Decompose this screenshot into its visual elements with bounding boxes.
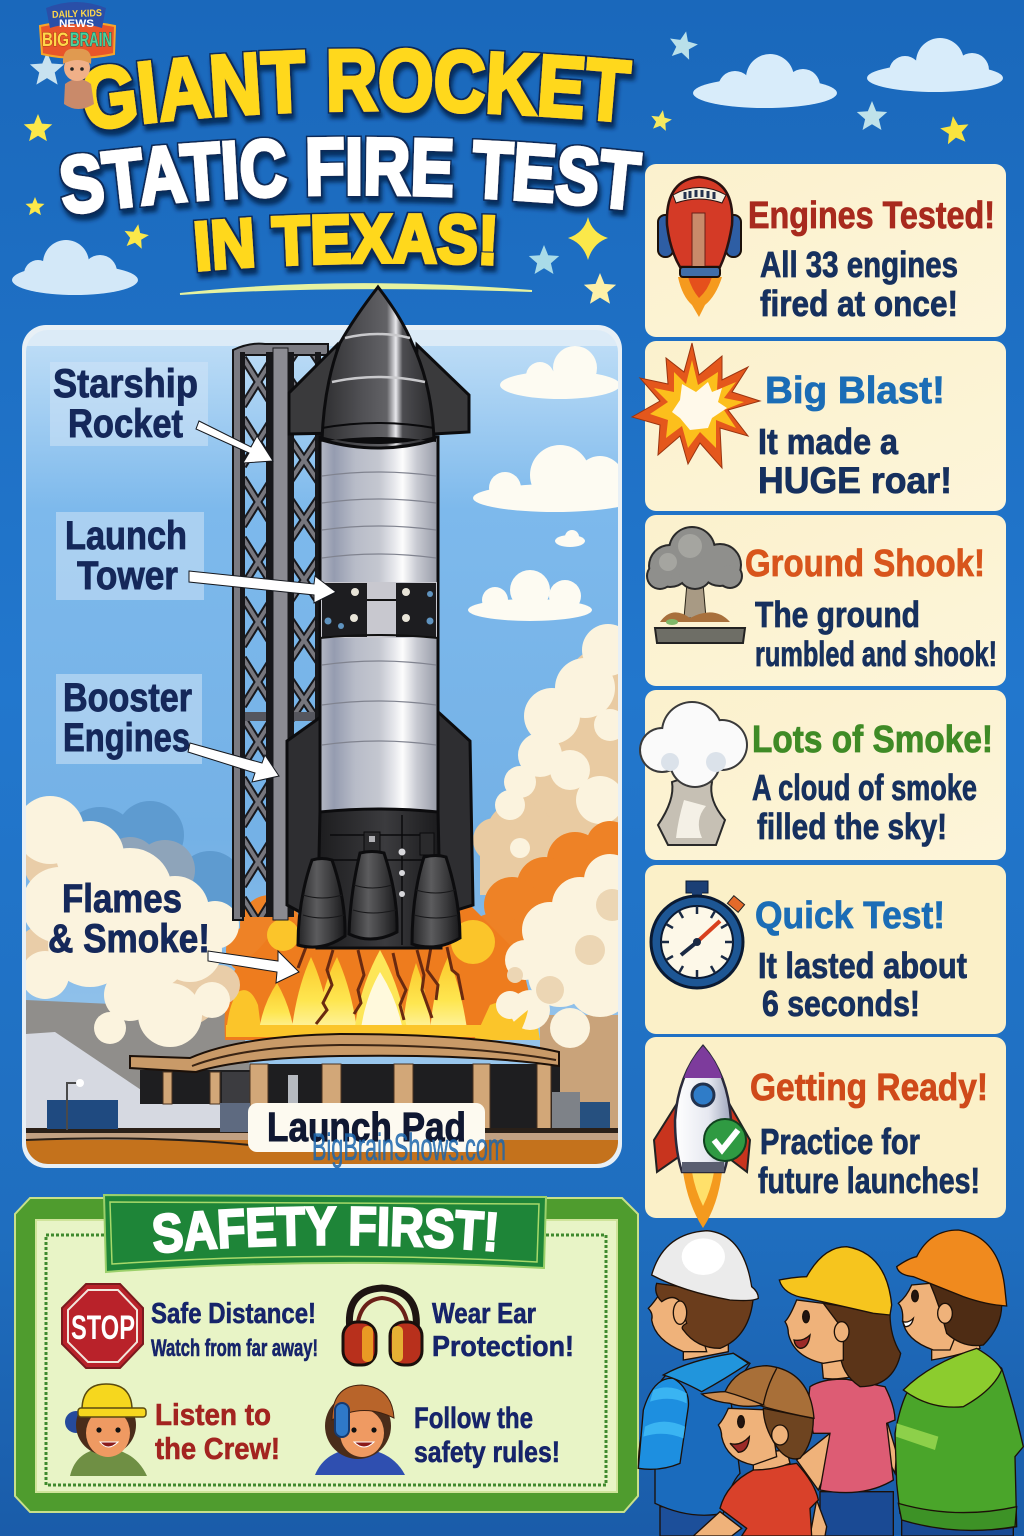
card: Big Blast: Big Blast! bbox=[765, 370, 945, 412]
card: Quick Test: 6 seconds! bbox=[762, 983, 920, 1024]
label: Starship Rocket bbox=[50, 362, 208, 446]
nose cone bbox=[322, 287, 434, 448]
card: Getting Ready: Practice for bbox=[760, 1121, 920, 1162]
person: small child in brown cap and red shirt bbox=[693, 1366, 827, 1536]
text: safe distance bbox=[151, 1298, 318, 1362]
decorations: sky clouds and stars bbox=[12, 28, 1003, 304]
children watching in hard hats bbox=[638, 1230, 1023, 1536]
flames bbox=[225, 905, 540, 1040]
card: Big Blast bbox=[632, 341, 1006, 511]
launch tower bbox=[233, 344, 328, 920]
body bbox=[320, 437, 438, 812]
logo: Daily Kids News with Big Brain: BIG bbox=[42, 30, 69, 51]
rocket bbox=[287, 287, 473, 948]
label: Launch Tower bbox=[56, 512, 204, 600]
light hill bbox=[26, 1032, 220, 1128]
cloud top right bbox=[867, 38, 1003, 92]
sparkle yellow bbox=[568, 217, 608, 260]
label: Booster Engines bbox=[56, 674, 202, 764]
icon: smoke cloud bbox=[639, 701, 748, 845]
label: Starship Rocket: Starship bbox=[53, 362, 198, 406]
star pale top left bbox=[30, 52, 64, 85]
panel: safety first bbox=[14, 1194, 639, 1513]
panel frame bbox=[22, 325, 622, 1168]
cloud top centre right bbox=[693, 54, 837, 108]
panel frame bbox=[15, 1198, 638, 1512]
arrow: to flames bbox=[208, 951, 299, 983]
text: ear protection bbox=[432, 1298, 574, 1363]
label: Launch Pad: Launch Pad bbox=[267, 1104, 466, 1150]
person: adult in orange hat and green hoodie bbox=[895, 1230, 1023, 1536]
icon: capsule rocket bbox=[658, 177, 741, 317]
star pale right of title bbox=[529, 245, 559, 274]
smoke right foreground bbox=[496, 854, 618, 1048]
card: Engines Tested bbox=[645, 164, 1006, 337]
text: ear protection: Protection! bbox=[432, 1331, 574, 1363]
text: follow safety rules bbox=[414, 1402, 560, 1469]
logo sign bbox=[40, 22, 115, 58]
icon: stop sign: STOP bbox=[71, 1309, 135, 1347]
card: Quick Test: Quick Test! bbox=[755, 895, 945, 937]
black thrust section bbox=[317, 809, 441, 948]
label: Flames and Smoke bbox=[48, 877, 210, 961]
engines bbox=[298, 858, 345, 947]
banner bbox=[103, 1194, 547, 1274]
label: Booster Engines: Engines bbox=[63, 716, 190, 760]
card: Getting Ready: Getting Ready! bbox=[750, 1067, 988, 1109]
title: GIANT ROCKET bbox=[81, 46, 638, 138]
star cream bbox=[584, 273, 616, 304]
logo character bbox=[63, 49, 94, 109]
star pale mid bbox=[857, 101, 887, 130]
banner: SAFETY FIRST! bbox=[153, 1206, 498, 1254]
icon: white rocket bbox=[654, 1046, 750, 1228]
text: listen to crew bbox=[155, 1397, 280, 1466]
card: Big Blast: HUGE roar! bbox=[758, 460, 952, 501]
arrow: to rocket band bbox=[189, 571, 336, 603]
upper fins bbox=[289, 345, 340, 434]
text: follow safety rules: Follow the bbox=[414, 1402, 533, 1435]
ground and equipment bbox=[26, 1128, 618, 1133]
logo: Daily Kids News with Big Brain: BRAIN bbox=[70, 30, 112, 51]
smoke left foreground bbox=[26, 854, 240, 1022]
launch pad building bbox=[130, 1034, 560, 1134]
star yellow near cloud bbox=[122, 222, 150, 250]
icon: stop sign bbox=[62, 1284, 143, 1368]
card: Ground Shook bbox=[645, 515, 1006, 686]
label: Flames and Smoke: Flames bbox=[62, 877, 182, 921]
text: ear protection: Wear Ear bbox=[432, 1298, 536, 1330]
icon: child with ear muffs bbox=[315, 1385, 405, 1475]
card: Quick Test bbox=[645, 865, 1006, 1034]
arrow: to tower bbox=[196, 421, 273, 463]
title: STATIC FIRE TEST bbox=[58, 135, 649, 224]
text: listen to crew: the Crew! bbox=[155, 1431, 280, 1466]
cloud left bbox=[12, 240, 138, 295]
person: child in white hat and blue hoodie bbox=[638, 1231, 758, 1536]
icon: mushroom cloud bbox=[646, 526, 745, 643]
label: Flames and Smoke: & Smoke! bbox=[48, 917, 210, 961]
card: Big Blast: It made a bbox=[758, 421, 899, 462]
lower fins bbox=[287, 716, 330, 912]
text: safe distance: Watch from far away! bbox=[151, 1335, 318, 1362]
logo: Daily Kids News with Big Brain: NEWS bbox=[59, 18, 94, 30]
star yellow near cards bbox=[649, 108, 673, 132]
text: follow safety rules: safety rules! bbox=[414, 1436, 560, 1469]
text: safe distance: Safe Distance! bbox=[151, 1298, 316, 1330]
icon: stopwatch bbox=[651, 881, 745, 988]
icon: ear defenders bbox=[343, 1288, 422, 1365]
star yellow right bbox=[939, 114, 971, 145]
panel: fact cards bbox=[632, 164, 1006, 1228]
far smoke right: tan bbox=[473, 654, 618, 895]
icon: child in hard hat bbox=[65, 1384, 147, 1476]
text: listen to crew: Listen to bbox=[155, 1397, 271, 1432]
title: IN TEXAS! bbox=[192, 212, 502, 281]
star yellow bbox=[24, 114, 52, 141]
title underline swoosh bbox=[180, 284, 532, 294]
card: Ground Shook: Ground Shook! bbox=[745, 543, 985, 585]
card: Lots of Smoke: Lots of Smoke! bbox=[752, 719, 993, 761]
title bbox=[58, 46, 649, 281]
label: Launch Tower: Launch bbox=[65, 514, 187, 558]
label: Launch Tower: Tower bbox=[77, 554, 178, 598]
card: Engines Tested: fired at once! bbox=[760, 283, 958, 324]
star yellow small bbox=[26, 197, 44, 215]
person: girl in yellow hat and pink shirt bbox=[779, 1247, 901, 1536]
grey backdrop behind hill bbox=[26, 1000, 250, 1090]
arrow: to booster bbox=[188, 743, 279, 782]
card: Quick Test: It lasted about bbox=[758, 945, 967, 986]
logo: Daily Kids News with Big Brain bbox=[40, 2, 115, 109]
card: Ground Shook: The ground bbox=[755, 594, 920, 635]
far smoke right: cream edge bbox=[495, 624, 618, 858]
far smoke left bbox=[80, 801, 232, 908]
watermark: BigBrainShows.com bbox=[312, 1127, 506, 1169]
star pale top bbox=[667, 28, 700, 61]
icon: explosion bbox=[632, 343, 760, 468]
card: Lots of Smoke bbox=[639, 690, 1006, 860]
panel: rocket scene bbox=[15, 287, 655, 1169]
body band bbox=[320, 582, 438, 638]
label: Booster Engines: Booster bbox=[63, 676, 192, 720]
card: Lots of Smoke: filled the sky! bbox=[757, 806, 947, 847]
logo: Daily Kids News with Big Brain: DAILY KIDS bbox=[52, 8, 102, 21]
label: Starship Rocket: Rocket bbox=[68, 402, 183, 446]
sky clouds bbox=[468, 346, 618, 621]
card: Getting Ready bbox=[645, 1037, 1006, 1228]
orange smoke bbox=[226, 821, 634, 977]
card: Engines Tested: All 33 engines bbox=[760, 244, 958, 285]
